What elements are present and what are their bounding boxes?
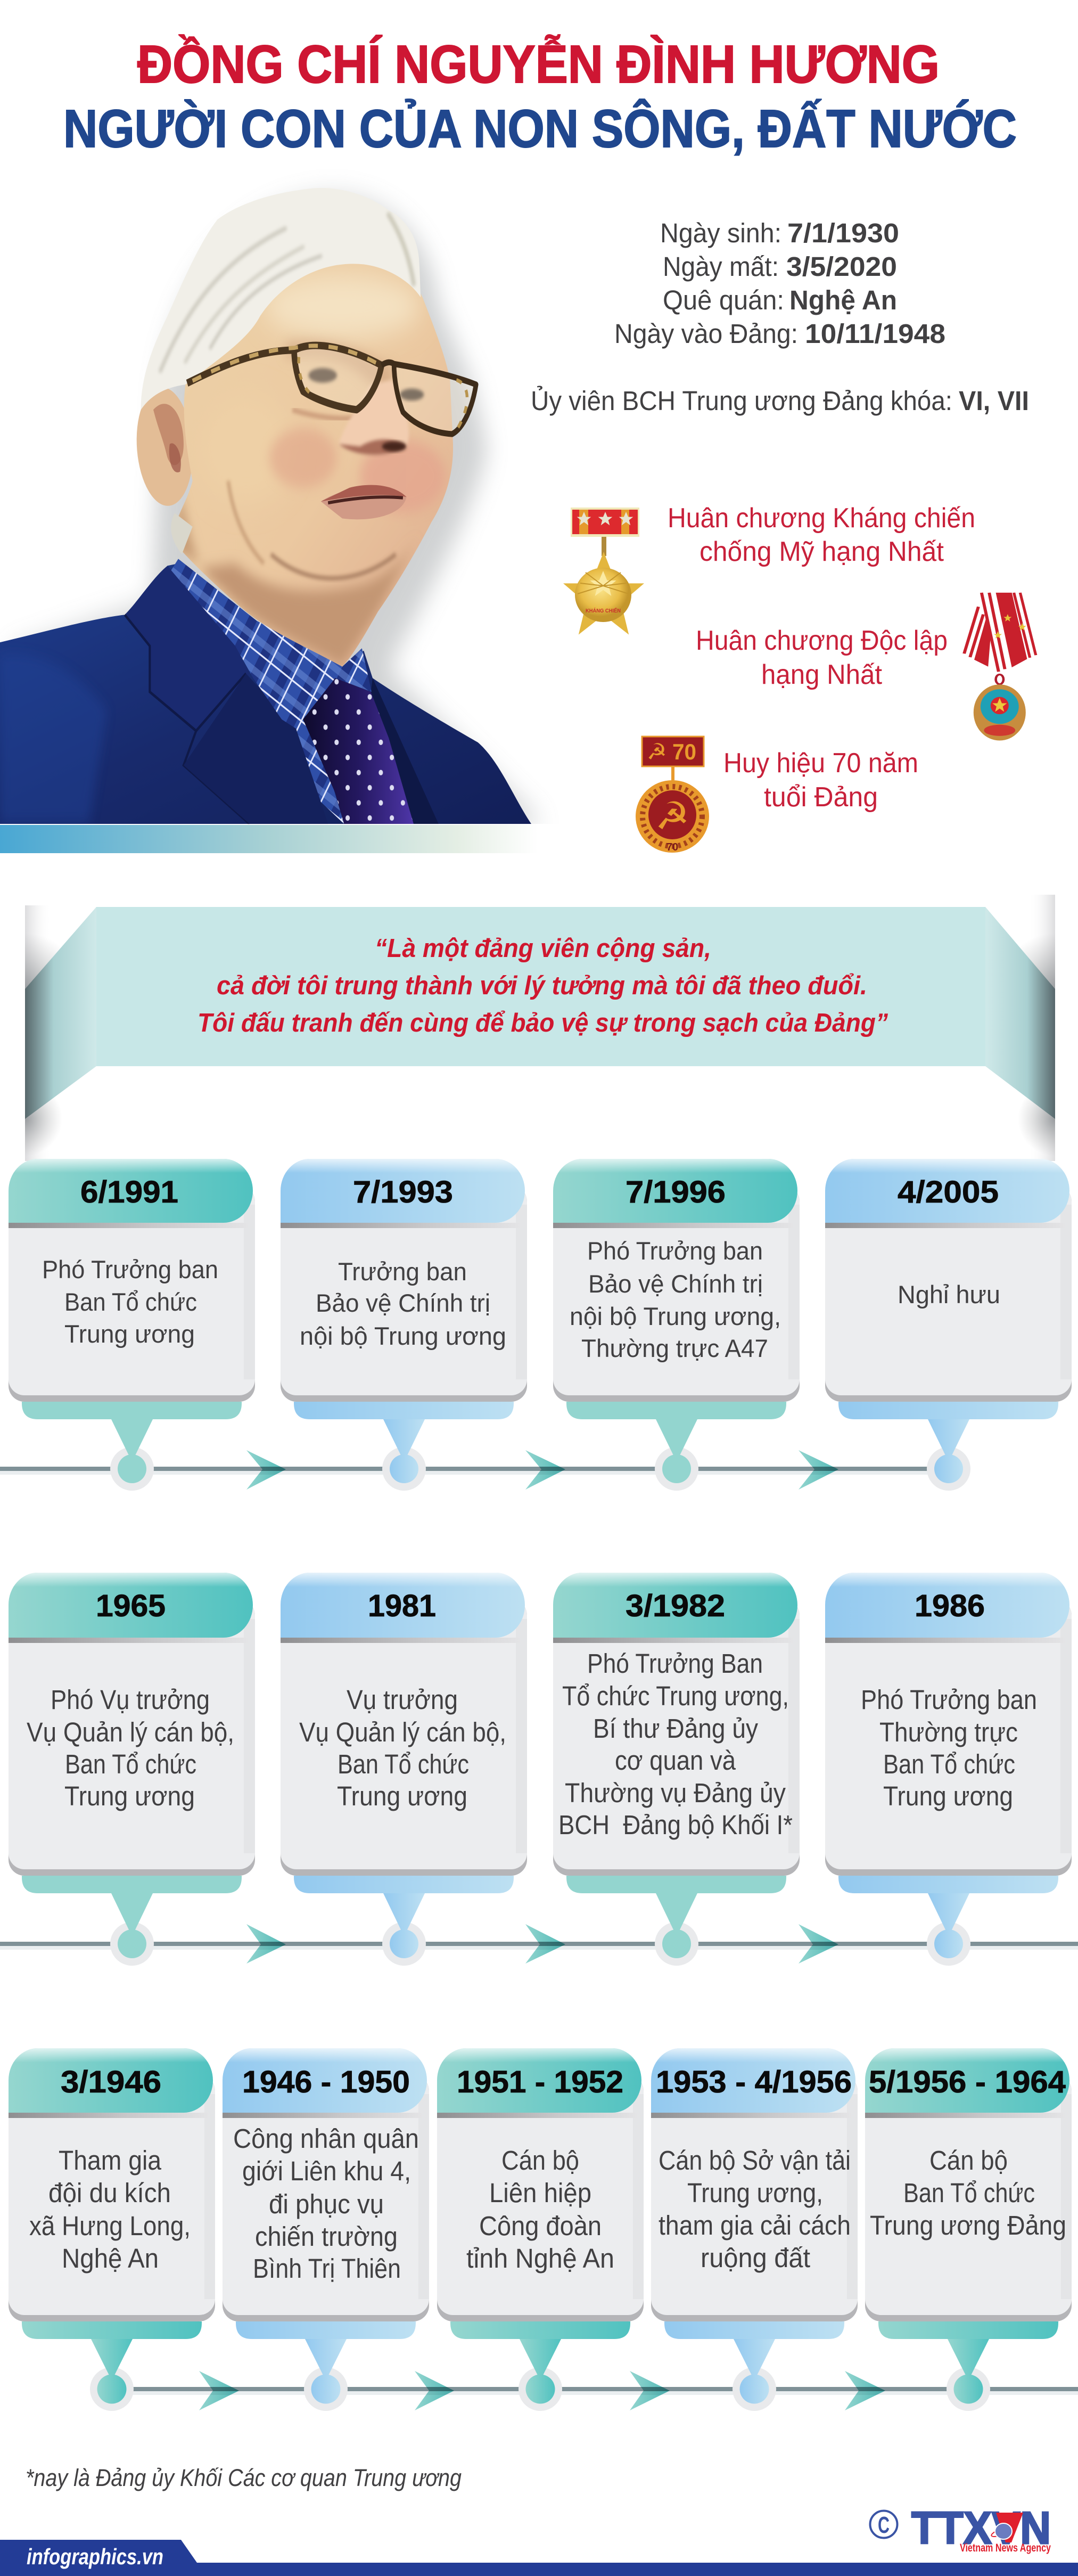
card text: Trung ương [337,1781,467,1811]
logo: TTXVN: TTXVN [911,2503,1051,2554]
card text: Thường trực [879,1717,1018,1747]
card: 3/1982 [553,1573,800,1966]
card text: Ban Tổ chức [65,1749,196,1779]
icon: resistance medal [563,508,644,635]
card text: đi phục vụ [269,2189,384,2219]
card: 1953 - 4/1956 [651,2048,858,2411]
card text: Bình Trị Thiên [253,2253,401,2284]
card text [300,1257,506,1350]
card: 1981 [281,1573,527,1966]
info block [531,218,1029,416]
card text: BCH Đảng bộ Khối I* [558,1810,793,1840]
card text [861,1684,1037,1811]
card: 1951 - 1952: 1951 - 1952 [457,2065,623,2099]
footnote: *nay là Đảng ủy Khối Các cơ quan Trung ương [26,2464,462,2491]
card: 7/1996 [553,1159,800,1491]
card: 1965 [9,1573,255,1966]
card text: đội du kích [48,2178,171,2208]
card text: xã Hưng Long, [29,2211,191,2241]
timeline line: row 3 [112,2387,1078,2395]
award text: chống Mỹ hạng Nhất [700,536,944,567]
arrows: row 3 [199,2371,885,2410]
icon: party badge: 70 [666,841,678,853]
quote banner [0,895,1078,1161]
award: resistance order [563,503,975,635]
card text [29,2145,191,2274]
footer bar [0,2540,1078,2576]
footer bar: infographics.vn [27,2544,163,2569]
award: independence order [696,593,1037,740]
title [63,35,1017,159]
card: 1953 - 4/1956: 1953 - 4/1956 [656,2065,852,2099]
card text [42,1255,218,1348]
card text: Vụ Quản lý cán bộ, [27,1717,234,1747]
card text [27,1684,234,1811]
card text [570,1237,781,1362]
card text: Ban Tổ chức [338,1749,469,1779]
quote text [198,934,888,1037]
card: 7/1993 [281,1159,527,1491]
card text: Trung ương [64,1320,195,1348]
card text: Nghỉ hưu [898,1280,1000,1309]
icon: party badge [636,737,709,853]
card text: giới Liên khu 4, [242,2156,411,2186]
info block: Ngày sinh: [660,218,781,248]
card text: Ban Tổ chức [883,1749,1015,1779]
card text: tham gia cải cách [659,2210,851,2240]
award: 70 year party badge [636,737,918,853]
card: 6/1991: 6/1991 [80,1175,178,1209]
award text [668,503,975,567]
card text: Tổ chức Trung ương, [562,1681,789,1711]
icon: independence medal [963,593,1037,740]
card text: nội bộ Trung ương, [570,1302,781,1330]
card text [233,2123,419,2284]
icon: party badge: ☭ [647,739,667,765]
card: 3/1946: 3/1946 [61,2065,161,2099]
card: 1981: 1981 [368,1589,436,1623]
quote text: Tôi đấu tranh đến cùng để bảo vệ sự trong sạch của Đảng” [198,1009,888,1037]
card text: Cán bộ [929,2145,1008,2176]
card text: Trưởng ban [338,1257,467,1286]
quote text: cả đời tôi trung thành với lý tưởng mà tôi đã theo đuổi. [217,971,867,1000]
card text: Phó Vụ trưởng [51,1684,210,1715]
info block: VI, VII [959,386,1029,416]
card text: Phó Trưởng Ban [587,1648,763,1679]
card text: cơ quan và [615,1745,736,1776]
card: 7/1996: 7/1996 [626,1175,726,1209]
info block: 3/5/2020 [786,251,897,282]
card text: Công nhân quân [233,2123,419,2154]
award text: hạng Nhất [761,659,883,690]
card: 1986: 1986 [915,1589,985,1623]
logo: TTXVN: C [878,2512,890,2538]
card text: Trung ương [883,1781,1013,1811]
card text: Bảo vệ Chính trị [588,1270,763,1298]
card text: Công đoàn [479,2211,602,2241]
card text: Liên hiệp [489,2178,591,2208]
card text: Phó Trưởng ban [42,1255,218,1283]
info block: 10/11/1948 [805,318,945,349]
info block: Quê quán: [663,285,784,315]
icon: party badge: ☭ [655,794,689,838]
card text [870,2145,1066,2240]
card text: Cán bộ Sở vận tải [659,2145,851,2176]
card text [466,2145,614,2274]
card text: Vụ Quản lý cán bộ, [299,1717,506,1747]
card: 4/2005: 4/2005 [898,1175,999,1209]
card text: Ban Tổ chức [903,2178,1035,2208]
card text: Phó Trưởng ban [861,1684,1037,1715]
card text: Thường trực A47 [581,1334,768,1362]
card: 1986 [825,1573,1072,1966]
portrait photo [0,188,545,826]
card text: Phó Trưởng ban [587,1237,763,1265]
info block: 7/1/1930 [787,218,899,248]
info block: Ngày mất: [663,251,779,282]
award text: Huân chương Độc lập [696,625,948,656]
card: 3/1946 [9,2048,215,2411]
award text: tuổi Đảng [764,782,878,813]
info block: Ủy viên BCH Trung ương Đảng khóa: [531,385,952,416]
icon: resistance medal: KHÁNG CHIẾN [586,607,621,614]
card text: chiến trường [255,2221,398,2252]
card text: Vụ trưởng [347,1684,458,1715]
card text [299,1684,506,1811]
card text: tỉnh Nghệ An [466,2243,614,2274]
card: 6/1991 [9,1159,255,1491]
card: 7/1993: 7/1993 [353,1175,453,1209]
card text: Nghệ An [62,2243,159,2274]
card text: Trung ương, [687,2178,823,2208]
card text: Bảo vệ Chính trị [316,1289,490,1317]
card text [659,2145,851,2273]
timeline line: row 1 [0,1467,949,1475]
portrait strip [0,825,538,853]
title: ĐỒNG CHÍ NGUYỄN ĐÌNH HƯƠNG [137,35,940,94]
award text [723,748,918,813]
card: 5/1956 - 1964: 5/1956 - 1964 [869,2065,1066,2099]
card text: Bí thư Đảng ủy [593,1713,758,1744]
info block: Nghệ An [789,285,897,315]
card text: Trung ương [64,1781,195,1811]
card text: Tham gia [59,2145,162,2176]
arrows: row 2 [246,1924,838,1964]
card text: nội bộ Trung ương [300,1322,506,1350]
info block: Ngày vào Đảng: [614,318,798,349]
logo: TTXVN: Vietnam News Agency [960,2542,1051,2554]
quote text: “Là một đảng viên cộng sản, [375,934,711,963]
card text: ruộng đất [701,2243,810,2273]
card: 1946 - 1950: 1946 - 1950 [242,2065,410,2099]
award text [696,625,948,690]
award text: Huân chương Kháng chiến [668,503,975,534]
card: 4/2005 [825,1159,1072,1491]
card: 1965: 1965 [96,1589,166,1623]
icon: party badge: 70 [672,739,696,764]
award text: Huy hiệu 70 năm [723,748,918,779]
card: 1946 - 1950 [223,2048,429,2411]
card text: Thường vụ Đảng ủy [565,1778,786,1808]
card: 3/1982: 3/1982 [626,1589,725,1623]
card text [558,1648,793,1840]
card text: Ban Tổ chức [64,1288,197,1316]
timeline line: row 2 [0,1942,1078,1950]
card: 1951 - 1952 [437,2048,644,2411]
card: 5/1956 - 1964 [865,2048,1072,2411]
arrows: row 1 [246,1450,838,1490]
card text: Cán bộ [501,2145,579,2176]
